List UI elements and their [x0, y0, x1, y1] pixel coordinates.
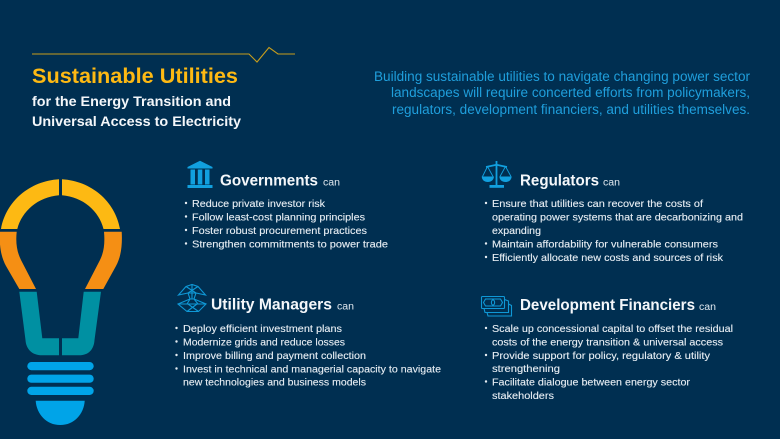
title: Sustainable Utilities: [32, 65, 238, 88]
bullet list: Provide support for policy, regulatory & utility: [492, 350, 711, 362]
bullet list: strengthening: [492, 363, 560, 375]
bullet list: Ensure that utilities can recover the costs of: [492, 198, 703, 210]
bullet list: Scale up concessional capital to offset the residual: [492, 323, 733, 335]
bullet list: Modernize grids and reduce losses: [183, 336, 345, 348]
can label: can: [323, 178, 340, 188]
bullet list: [485, 198, 743, 264]
bullet list: Reduce private investor risk: [192, 198, 326, 210]
heading: Utility Managers: [211, 296, 332, 314]
title block: [32, 65, 241, 129]
bullet list: new technologies and business models: [183, 376, 366, 388]
bullet list: Foster robust procurement practices: [192, 225, 367, 237]
heading: Development Financiers: [520, 297, 695, 314]
icon: transmission tower: [178, 284, 206, 312]
intro text block: landscapes will require concerted efforts from policymakers,: [391, 85, 750, 100]
panel: Regulators: [482, 161, 743, 264]
heading: Regulators: [520, 172, 599, 190]
heading: Governments: [220, 172, 318, 190]
intro text block: [374, 69, 751, 117]
intro text block: Building sustainable utilities to navigate changing power sector: [374, 69, 751, 84]
panel: Development Financiers: [482, 296, 733, 402]
panel: Utility Managers: [175, 284, 441, 388]
panel: Governments: [185, 161, 388, 250]
can label: can: [603, 178, 620, 188]
can label: can: [699, 302, 716, 313]
bullet list: Deploy efficient investment plans: [183, 323, 342, 335]
subtitle line 2: Universal Access to Electricity: [32, 113, 241, 129]
bullet list: [185, 198, 388, 250]
bullet list: [485, 323, 733, 402]
icon: scales of justice: [482, 161, 512, 188]
bullet list: Efficiently allocate new costs and sources of risk: [492, 252, 724, 264]
intro text block: regulators, development financiers, and utilities themselves.: [392, 102, 750, 117]
icon: light bulb: [0, 179, 122, 425]
bullet list: stakeholders: [492, 390, 554, 402]
bullet list: Facilitate dialogue between energy sector: [492, 376, 691, 388]
icon: stack of banknotes: [482, 296, 512, 316]
bullet list: operating power systems that are decarbonizing and: [492, 212, 743, 224]
bullet list: Strengthen commitments to power trade: [192, 238, 388, 250]
bullet list: [175, 323, 441, 388]
icon: government building: [188, 161, 212, 188]
bullet list: costs of the energy transition & universal access: [492, 336, 723, 348]
bullet list: expanding: [492, 225, 541, 237]
subtitle line 1: for the Energy Transition and: [32, 93, 231, 109]
bullet list: Invest in technical and managerial capacity to navigate: [183, 364, 441, 376]
can label: can: [337, 302, 354, 312]
bullet list: Improve billing and payment collection: [183, 350, 366, 362]
bullet list: Maintain affordability for vulnerable consumers: [492, 238, 718, 250]
header accent pulse line: [32, 48, 295, 62]
bullet list: Follow least-cost planning principles: [192, 212, 365, 224]
